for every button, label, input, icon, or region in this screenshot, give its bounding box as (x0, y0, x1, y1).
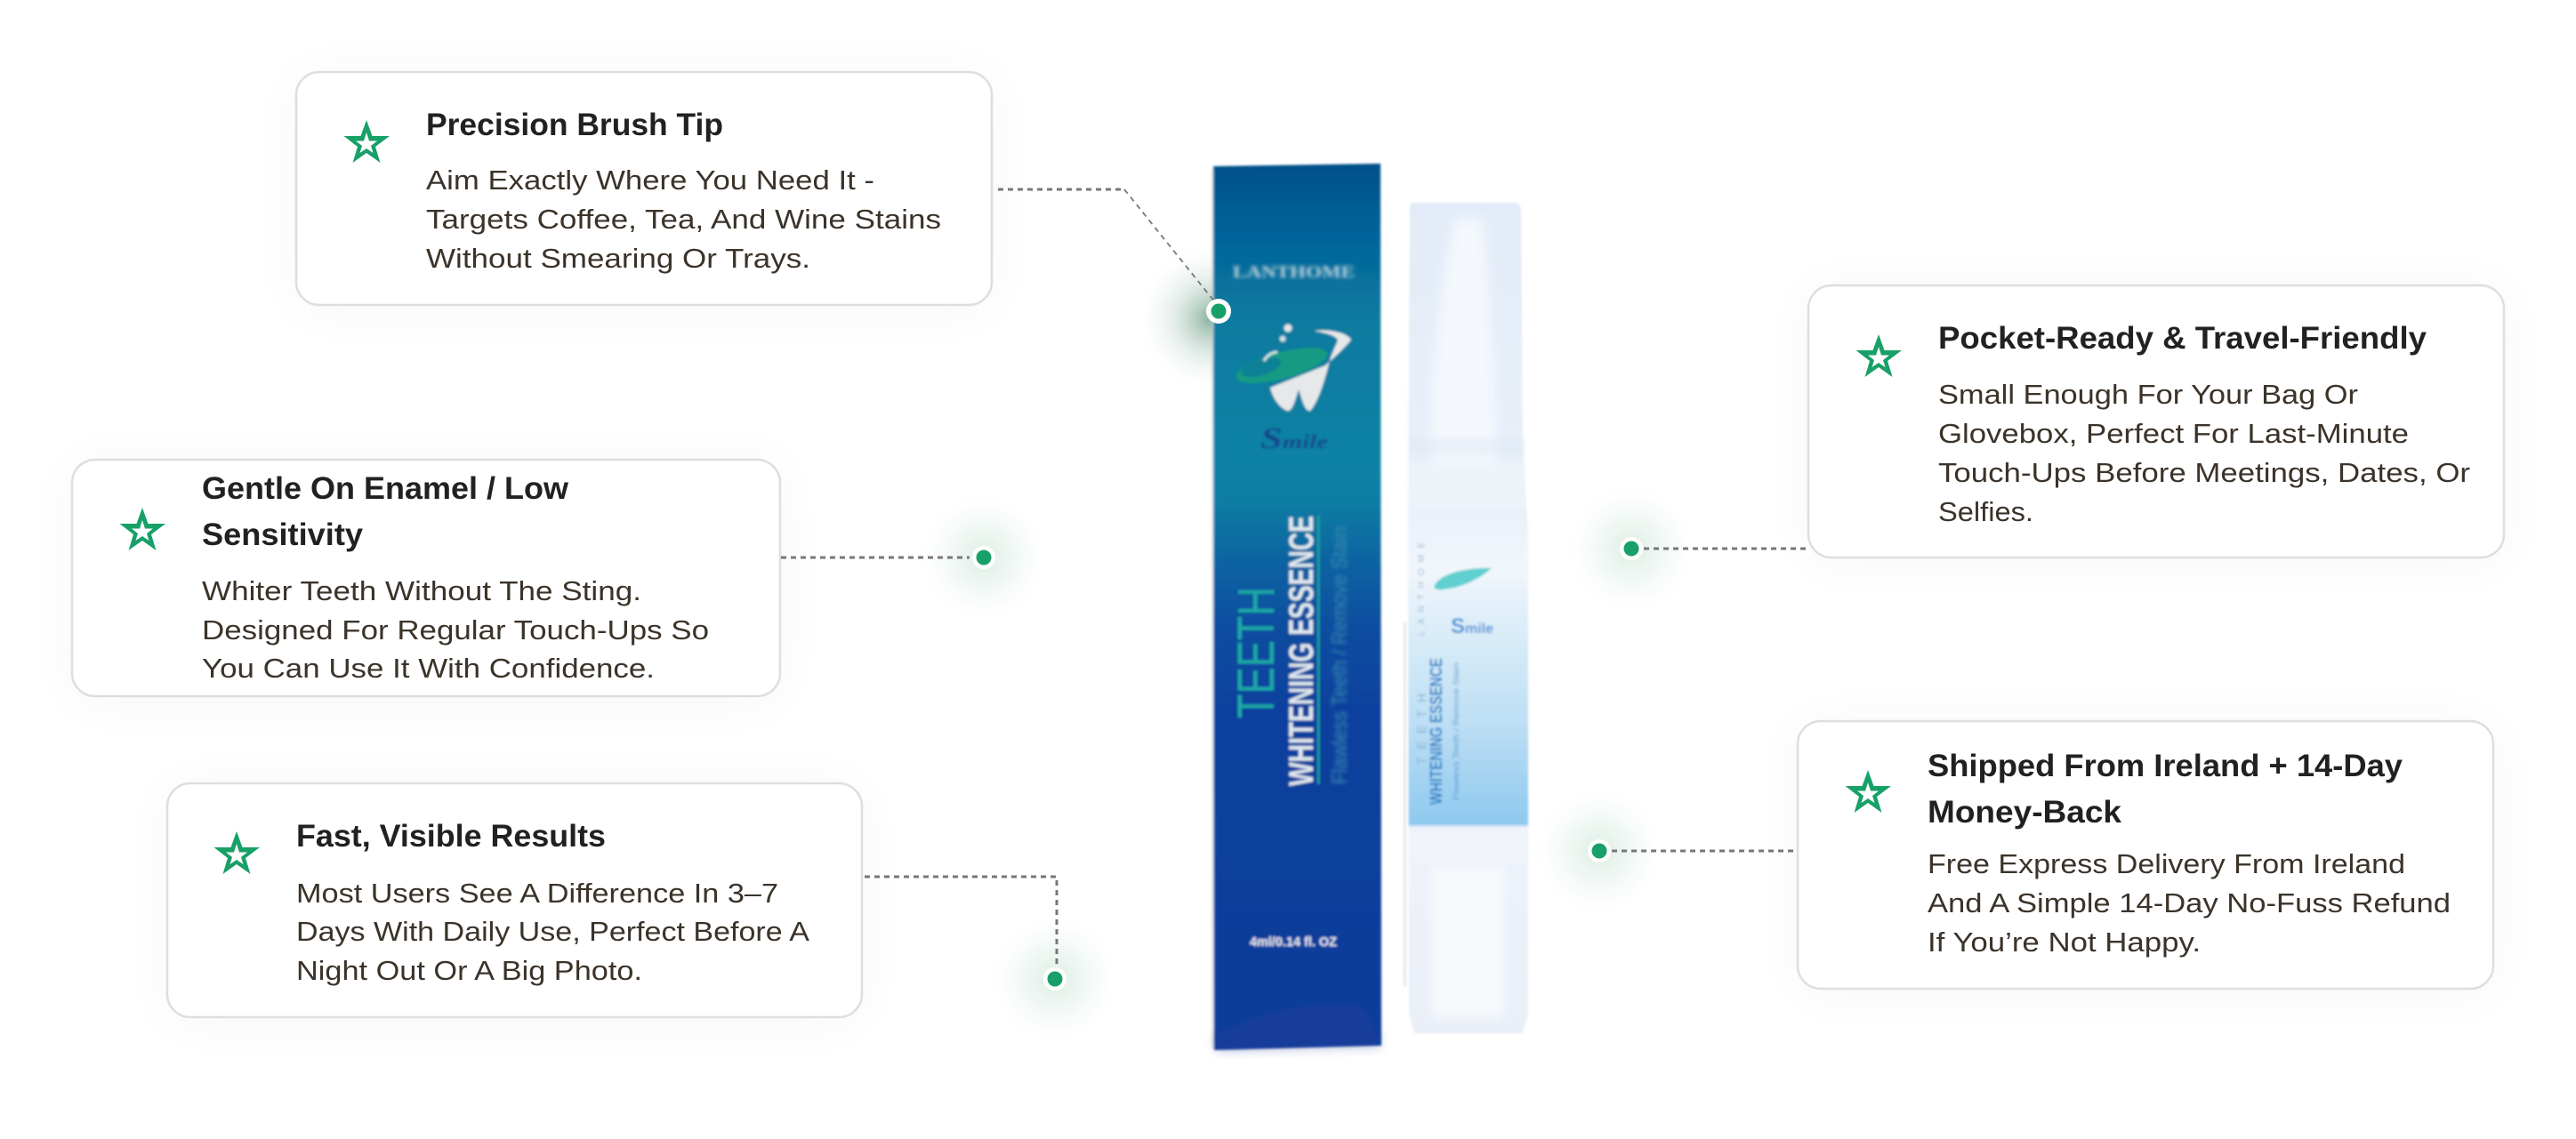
product: whitening essence box and pen (1212, 164, 1528, 1050)
body text (1928, 848, 2451, 958)
panel: precision brush tip (296, 72, 992, 309)
heading: Precision Brush Tip (426, 108, 723, 142)
connector and marker: pocket-ready (1569, 486, 1810, 611)
body text: Designed For Regular Touch-Ups So (202, 614, 709, 646)
icon: star (1845, 770, 1891, 813)
pen logo (1434, 568, 1492, 590)
body text: Whiter Teeth Without The Sting. (202, 575, 641, 606)
body text: You Can Use It With Confidence. (202, 653, 655, 684)
pen vertical tagline: Flawless Teeth / Remove Stain (1452, 662, 1461, 800)
body text: Targets Coffee, Tea, And Wine Stains (426, 204, 941, 235)
box brand name: LANTHOME (1233, 263, 1355, 282)
connector and marker: shipped from ireland (1537, 789, 1798, 913)
body text (296, 878, 809, 986)
pen lower cap (1432, 867, 1503, 1018)
product box (1212, 164, 1381, 1050)
body text: Touch-Ups Before Meetings, Dates, Or (1938, 457, 2470, 488)
icon: star (213, 831, 260, 874)
body text: Aim Exactly Where You Need It - (426, 164, 874, 196)
pen vertical whitening essence: WHITENING ESSENCE (1428, 658, 1446, 805)
body text: Free Express Delivery From Ireland (1928, 848, 2405, 879)
body text: Small Enough For Your Bag Or (1938, 379, 2358, 410)
icon: star (343, 120, 390, 163)
heading: Fast, Visible Results (296, 819, 606, 854)
pen vertical brand: LANTHOME (1417, 542, 1427, 636)
heading: Sensitivity (202, 517, 364, 552)
icon: star (1856, 334, 1902, 377)
body text: If You’re Not Happy. (1928, 926, 2201, 958)
pen brush shape (1430, 218, 1496, 462)
body text (1938, 379, 2470, 527)
panel: gentle on enamel (72, 460, 780, 700)
body text: Night Out Or A Big Photo. (296, 955, 642, 986)
heading: Gentle On Enamel / Low (202, 471, 569, 506)
product pen (1404, 203, 1528, 1033)
box vertical text: whitening essence: WHITENING ESSENCE (1283, 516, 1321, 786)
panel: pocket-ready and travel-friendly (1808, 285, 2504, 561)
box smile wordmark: S mile (1260, 422, 1328, 455)
pen vertical teeth: TEETH (1414, 694, 1429, 765)
connector: brush tip (998, 189, 1215, 302)
body text (426, 164, 941, 274)
heading (1928, 749, 2403, 830)
panel: shipped from ireland and money-back (1798, 721, 2493, 992)
box vertical text: tagline: Flawless Teeth / Remove Stain (1328, 526, 1352, 784)
body text: Days With Daily Use, Perfect Before A (296, 916, 809, 947)
box tooth logo (1233, 324, 1351, 411)
pen smile wordmark: Smile (1451, 614, 1493, 638)
panel: fast visible results (167, 783, 862, 1021)
glow: brush tip marker (1140, 247, 1283, 389)
heading: Pocket-Ready & Travel-Friendly (1938, 321, 2427, 356)
heading: Money-Back (1928, 795, 2122, 830)
connector and marker: fast visible results (865, 877, 1117, 1041)
body text: Glovebox, Perfect For Last-Minute (1938, 418, 2409, 449)
icon: star (119, 508, 165, 550)
box volume text: 4ml/0.14 fl. OZ (1250, 934, 1337, 950)
heading: Shipped From Ireland + 14-Day (1928, 749, 2403, 783)
marker: brush tip (1206, 299, 1231, 324)
heading (202, 471, 569, 552)
body text: And A Simple 14-Day No-Fuss Refund (1928, 887, 2451, 918)
body text: Without Smearing Or Trays. (426, 243, 810, 274)
body text: Most Users See A Difference In 3–7 (296, 878, 778, 909)
connector and marker: gentle on enamel (781, 495, 1046, 620)
box vertical text: teeth: TEETH (1228, 587, 1285, 718)
body text (202, 575, 709, 684)
body text: Selfies. (1938, 496, 2033, 527)
